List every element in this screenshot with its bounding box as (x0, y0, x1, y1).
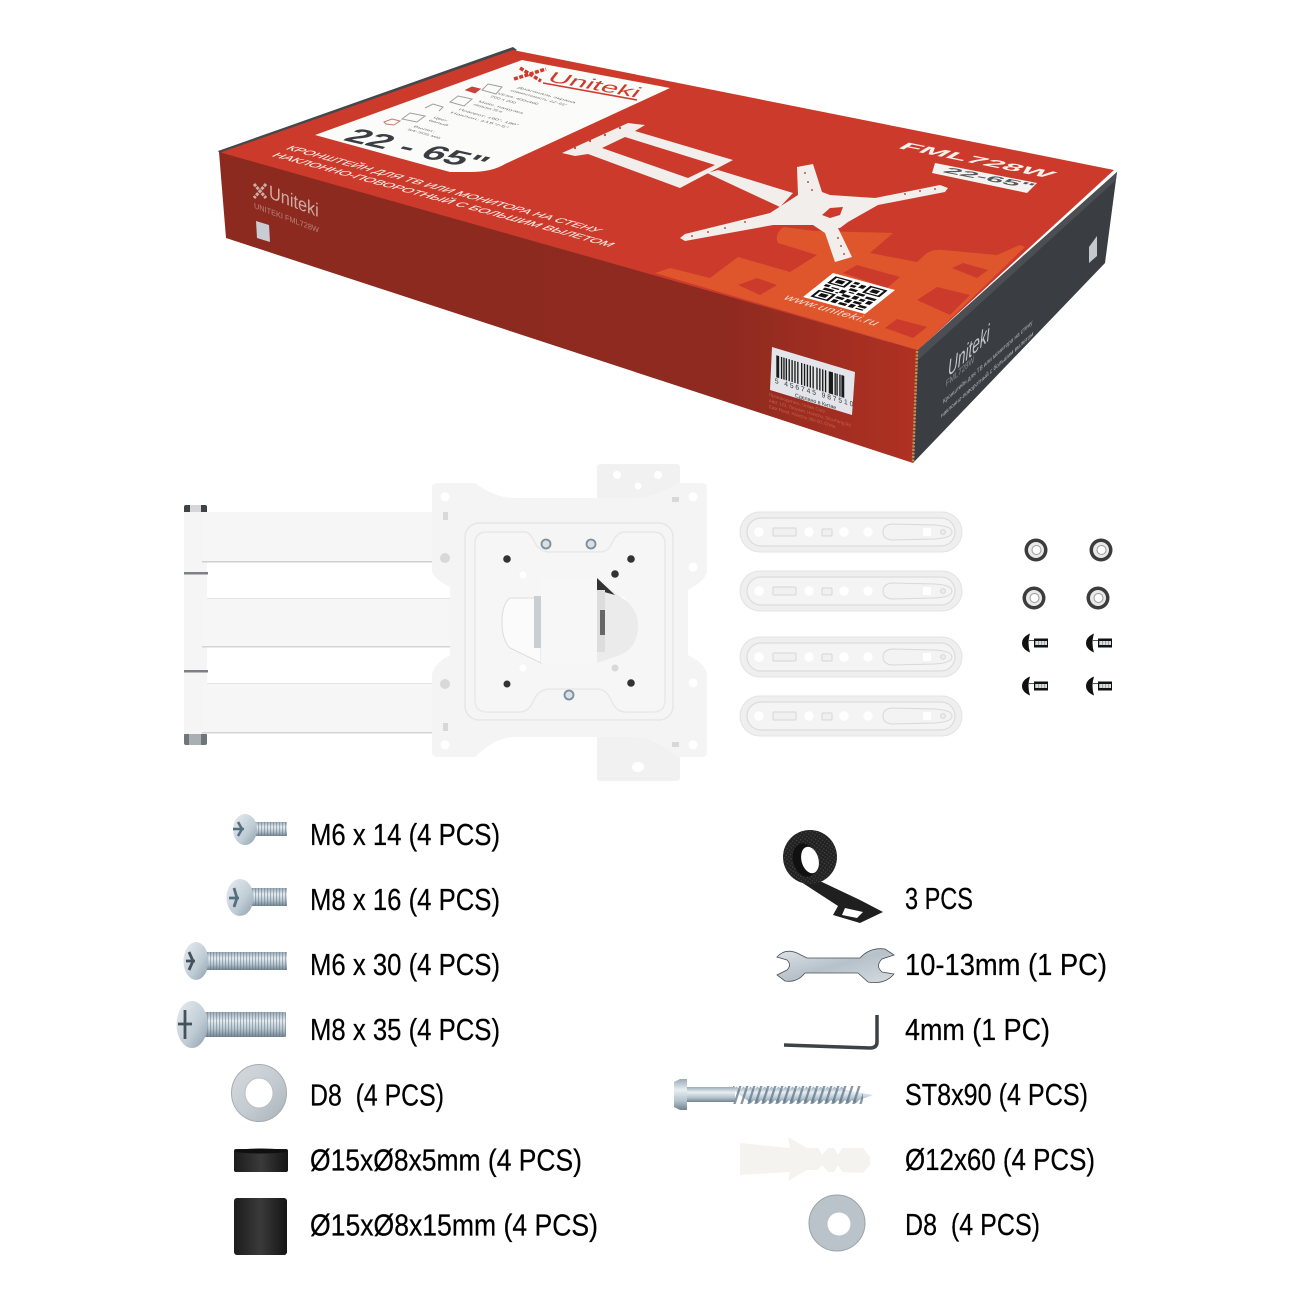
slat 3 (740, 637, 962, 677)
label: Ø12x60 (4 PCS) (905, 1142, 1095, 1177)
panel icons (384, 84, 502, 125)
icon: lag screw (674, 1079, 873, 1110)
manufacturer text: East Road, Hsinchu 300-00, China (769, 404, 836, 429)
label: 3 PCS (905, 881, 973, 916)
bracket connector arm (707, 170, 793, 207)
mounting slats (740, 512, 962, 736)
icon: M6x14 screw (233, 814, 287, 845)
label: 4mm (1 PC) (905, 1012, 1050, 1047)
left hardware list (176, 814, 598, 1255)
website: www.uniteki.ru (781, 293, 883, 328)
box top face (219, 50, 1114, 350)
box front face (219, 152, 918, 463)
small washers and screws (1022, 538, 1112, 696)
front logo (254, 182, 319, 222)
barcode label: 5 456745 987510 (775, 378, 853, 409)
side logo: Uniteki (948, 318, 990, 382)
screw (1022, 634, 1048, 652)
panel specs: Поворот: ±90°, 180° (457, 108, 520, 127)
side square (1089, 236, 1097, 263)
washer (1086, 586, 1110, 610)
label: ST8x90 (4 PCS) (905, 1077, 1088, 1112)
panel specs: белый (427, 119, 451, 127)
icon: M6x30 screw (184, 942, 287, 980)
panel specs: Цвет: (432, 116, 450, 122)
orange pattern on lid (655, 227, 1025, 350)
box side face (913, 172, 1117, 463)
lid headline: КРОНШТЕЙН ДЛЯ ТВ ИЛИ МОНИТОРА НА СТЕНУ (282, 144, 607, 234)
box back edge (218, 47, 517, 156)
screw (1022, 676, 1048, 696)
icon: wall plug (740, 1137, 870, 1181)
washer (1090, 538, 1112, 562)
label: M6 x 14 (4 PCS) (310, 817, 500, 852)
label: D8 (4 PCS) (310, 1078, 444, 1112)
corrugated corner edge (913, 351, 917, 463)
tilt mechanism (502, 578, 638, 663)
icon: D8 washer (809, 1195, 865, 1251)
label: 10-13mm (1 PC) (905, 947, 1107, 982)
slat 2 (740, 571, 962, 611)
label: Ø15xØ8x15mm (4 PCS) (310, 1208, 598, 1242)
dark VESA holes (503, 555, 635, 688)
side top band (918, 172, 1117, 360)
screw (1086, 676, 1112, 696)
plate screws (542, 540, 596, 700)
bracket holes (574, 127, 936, 255)
side description: наклонно-поворотный с большим вылетом (941, 329, 1034, 420)
panel specs: VESA: 400x400 (496, 92, 541, 106)
panel size: 22 - 65" (337, 125, 497, 174)
panel specs: Диагональ экрана (516, 86, 578, 104)
front logo: Uniteki (269, 182, 319, 222)
panel specs: совместимость: 22"-65" (509, 89, 569, 107)
QR code (803, 273, 895, 314)
back wall plate (597, 464, 680, 781)
barcode label: Сделано в Китае (795, 393, 836, 411)
panel specs: Вылет: (412, 125, 437, 133)
panel specs: 200 x 200 (489, 95, 518, 104)
panel specs (406, 86, 578, 139)
size tag (932, 163, 1039, 193)
icon: tall spacer (234, 1198, 287, 1255)
front model text: UNITEKI FML728W (254, 201, 319, 235)
panel specs: Макс. нагрузка (477, 100, 526, 115)
barcode label (770, 347, 855, 417)
bracket on lid (562, 123, 948, 262)
icon: M8x35 screw (176, 1001, 286, 1048)
manufacturer text: Add: 123, Taoyuan, Hsinchu, Shu-Feng Rd (769, 398, 851, 428)
label: Ø15xØ8x5mm (4 PCS) (310, 1142, 582, 1178)
screw (1086, 634, 1112, 652)
icon: cable strap (783, 830, 883, 923)
front small square (256, 221, 270, 242)
white swivel bracket (184, 464, 707, 781)
icon: wrench (777, 949, 894, 983)
white label panel (315, 60, 670, 174)
hinge pin caps (184, 505, 207, 745)
hinge column (184, 512, 208, 734)
label: M6 x 30 (4 PCS) (310, 947, 500, 982)
icon: hex key (784, 1015, 877, 1048)
size tag: 22-65" (940, 166, 1039, 191)
side model: FML728W (946, 353, 975, 389)
label: M8 x 16 (4 PCS) (310, 882, 500, 917)
panel specs: 54-305 мм (406, 128, 442, 139)
panel specs: Наклон: ±15°/-5° (449, 111, 511, 129)
bracket cross (680, 164, 948, 262)
icon: short spacer (234, 1148, 288, 1172)
slat 1 (740, 512, 962, 552)
panel logo (514, 68, 646, 101)
panel specs: нагрузка 35 кг (472, 103, 505, 113)
label: D8 (4 PCS) (905, 1207, 1040, 1242)
panel logo: Uniteki (544, 69, 646, 101)
model name: FML728W (893, 141, 1061, 180)
corner holes (440, 492, 698, 750)
bracket frame (562, 123, 733, 188)
product box (218, 47, 1117, 463)
side description: Кронштейн для ТВ или монитора на стену (943, 317, 1033, 406)
icon: D8 washer (232, 1064, 286, 1122)
washer (1022, 586, 1046, 610)
lid headline: НАКЛОННО-ПОВОРОТНЫЙ С БОЛЬШИМ ВЫЛЕТОМ (268, 151, 619, 248)
swing arms (202, 512, 452, 734)
manufacturer text: Производитель: Unitek Corp (769, 392, 825, 414)
right hardware list (674, 830, 1107, 1251)
TV mounting plate (432, 483, 707, 757)
slat 4 (740, 696, 962, 736)
washer (1024, 538, 1048, 562)
label: M8 x 35 (4 PCS) (310, 1012, 500, 1047)
icon: M8x16 screw (226, 879, 287, 916)
